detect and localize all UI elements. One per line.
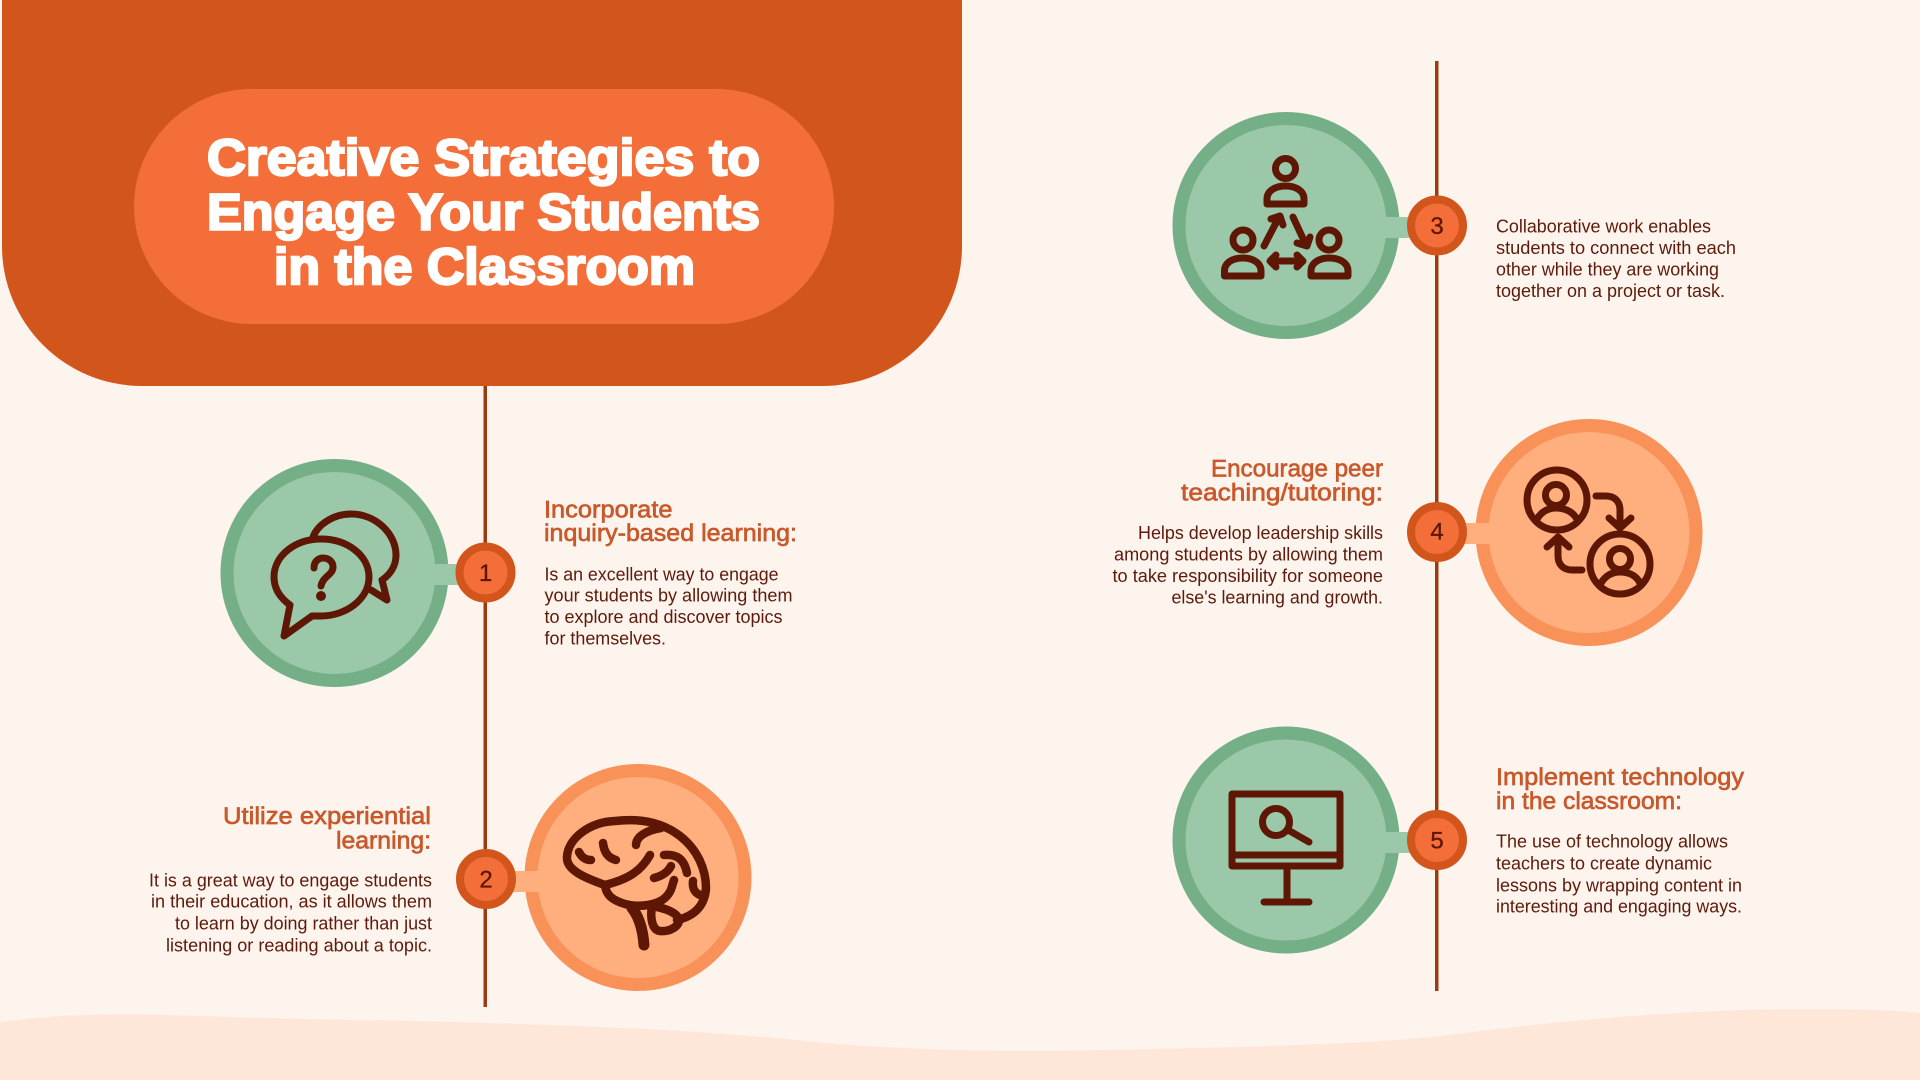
body text 2: to learn by doing rather than just <box>175 912 432 934</box>
step 4: peer teaching <box>1112 426 1696 640</box>
icon: peer exchange <box>1527 470 1650 594</box>
icon circle 4 <box>1482 426 1696 640</box>
title <box>207 129 760 295</box>
body text 1: to explore and discover topics <box>544 606 782 627</box>
badge 1: 1 <box>479 560 492 587</box>
badge 3 <box>1411 200 1463 252</box>
heading 4 <box>1181 456 1383 506</box>
body text 3: Collaborative work enables <box>1496 216 1711 236</box>
icon circle 1 <box>227 466 442 680</box>
connector 4 <box>1463 523 1493 544</box>
badge 1 <box>460 546 512 598</box>
body text 3: students to connect with each <box>1496 237 1736 258</box>
body text 1: Is an excellent way to engage <box>544 564 778 584</box>
heading 1: inquiry-based learning: <box>544 520 797 547</box>
icon: speech bubbles with question mark <box>274 514 396 636</box>
body text 5: teachers to create dynamic <box>1496 852 1712 874</box>
body text 4 <box>1112 522 1383 608</box>
step 1: inquiry-based learning <box>227 466 797 680</box>
body text 5: The use of technology allows <box>1496 830 1728 852</box>
badge 4 <box>1411 506 1463 558</box>
badge 5 <box>1411 814 1463 866</box>
connector overlay 1 <box>430 564 460 585</box>
body text 4: Helps develop leadership skills <box>1138 522 1383 543</box>
badge 2 <box>460 853 512 905</box>
connector 5 <box>1382 832 1412 853</box>
badge 4: 4 <box>1430 518 1444 546</box>
icon circle 2 <box>531 770 745 984</box>
heading 5: in the classroom: <box>1496 788 1682 815</box>
body text 3 <box>1496 216 1736 301</box>
right timeline line <box>1435 61 1438 991</box>
connector 1 <box>430 564 460 585</box>
body text 2: It is a great way to engage students <box>149 870 432 890</box>
body text 1 <box>544 564 792 648</box>
heading 2 <box>223 803 431 854</box>
body text 5 <box>1496 830 1742 916</box>
connector 3 <box>1382 217 1412 238</box>
badge 5: 5 <box>1430 828 1444 854</box>
body text 2: listening or reading about a topic. <box>166 934 432 956</box>
heading 2: learning: <box>336 828 431 854</box>
body text 4: to take responsibility for someone <box>1112 565 1383 586</box>
badge 2: 2 <box>479 866 493 894</box>
icon circle 5 <box>1179 733 1393 947</box>
body text 3: together on a project or task. <box>1496 280 1725 301</box>
title: Creative Strategies to <box>207 129 760 186</box>
icon circle 3 <box>1179 118 1393 332</box>
icon: monitor with magnifier <box>1232 794 1340 902</box>
badge 3: 3 <box>1430 213 1444 240</box>
left timeline line <box>484 386 487 1007</box>
step 5: technology <box>1179 733 1744 947</box>
heading 5: Implement technology <box>1496 764 1744 791</box>
icon: brain <box>567 820 706 945</box>
bottom wave <box>0 1009 1920 1080</box>
heading 4: Encourage peer <box>1211 456 1383 482</box>
body text 1: your students by allowing them <box>544 584 792 606</box>
body text 4: else's learning and growth. <box>1172 586 1383 608</box>
icon: three people with arrows <box>1224 158 1348 276</box>
heading 1 <box>544 496 797 547</box>
title: in the Classroom <box>274 238 695 295</box>
heading 4: teaching/tutoring: <box>1181 480 1383 506</box>
title panel <box>2 0 962 386</box>
heading 2: Utilize experiential <box>223 803 431 830</box>
connector 2 <box>512 871 541 892</box>
heading 5 <box>1496 764 1744 815</box>
body text 3: other while they are working <box>1496 258 1719 280</box>
body text 5: interesting and engaging ways. <box>1496 896 1742 916</box>
body text 4: among students by allowing them <box>1114 544 1383 564</box>
heading 1: Incorporate <box>544 496 672 524</box>
step 2: experiential learning <box>149 770 745 984</box>
title: Engage Your Students <box>207 184 760 240</box>
body text 2: in their education, as it allows them <box>151 890 432 912</box>
body text 2 <box>149 870 432 956</box>
body text 5: lessons by wrapping content in <box>1496 874 1742 896</box>
body text 1: for themselves. <box>544 628 666 648</box>
step 3: collaborative work <box>1179 118 1736 332</box>
